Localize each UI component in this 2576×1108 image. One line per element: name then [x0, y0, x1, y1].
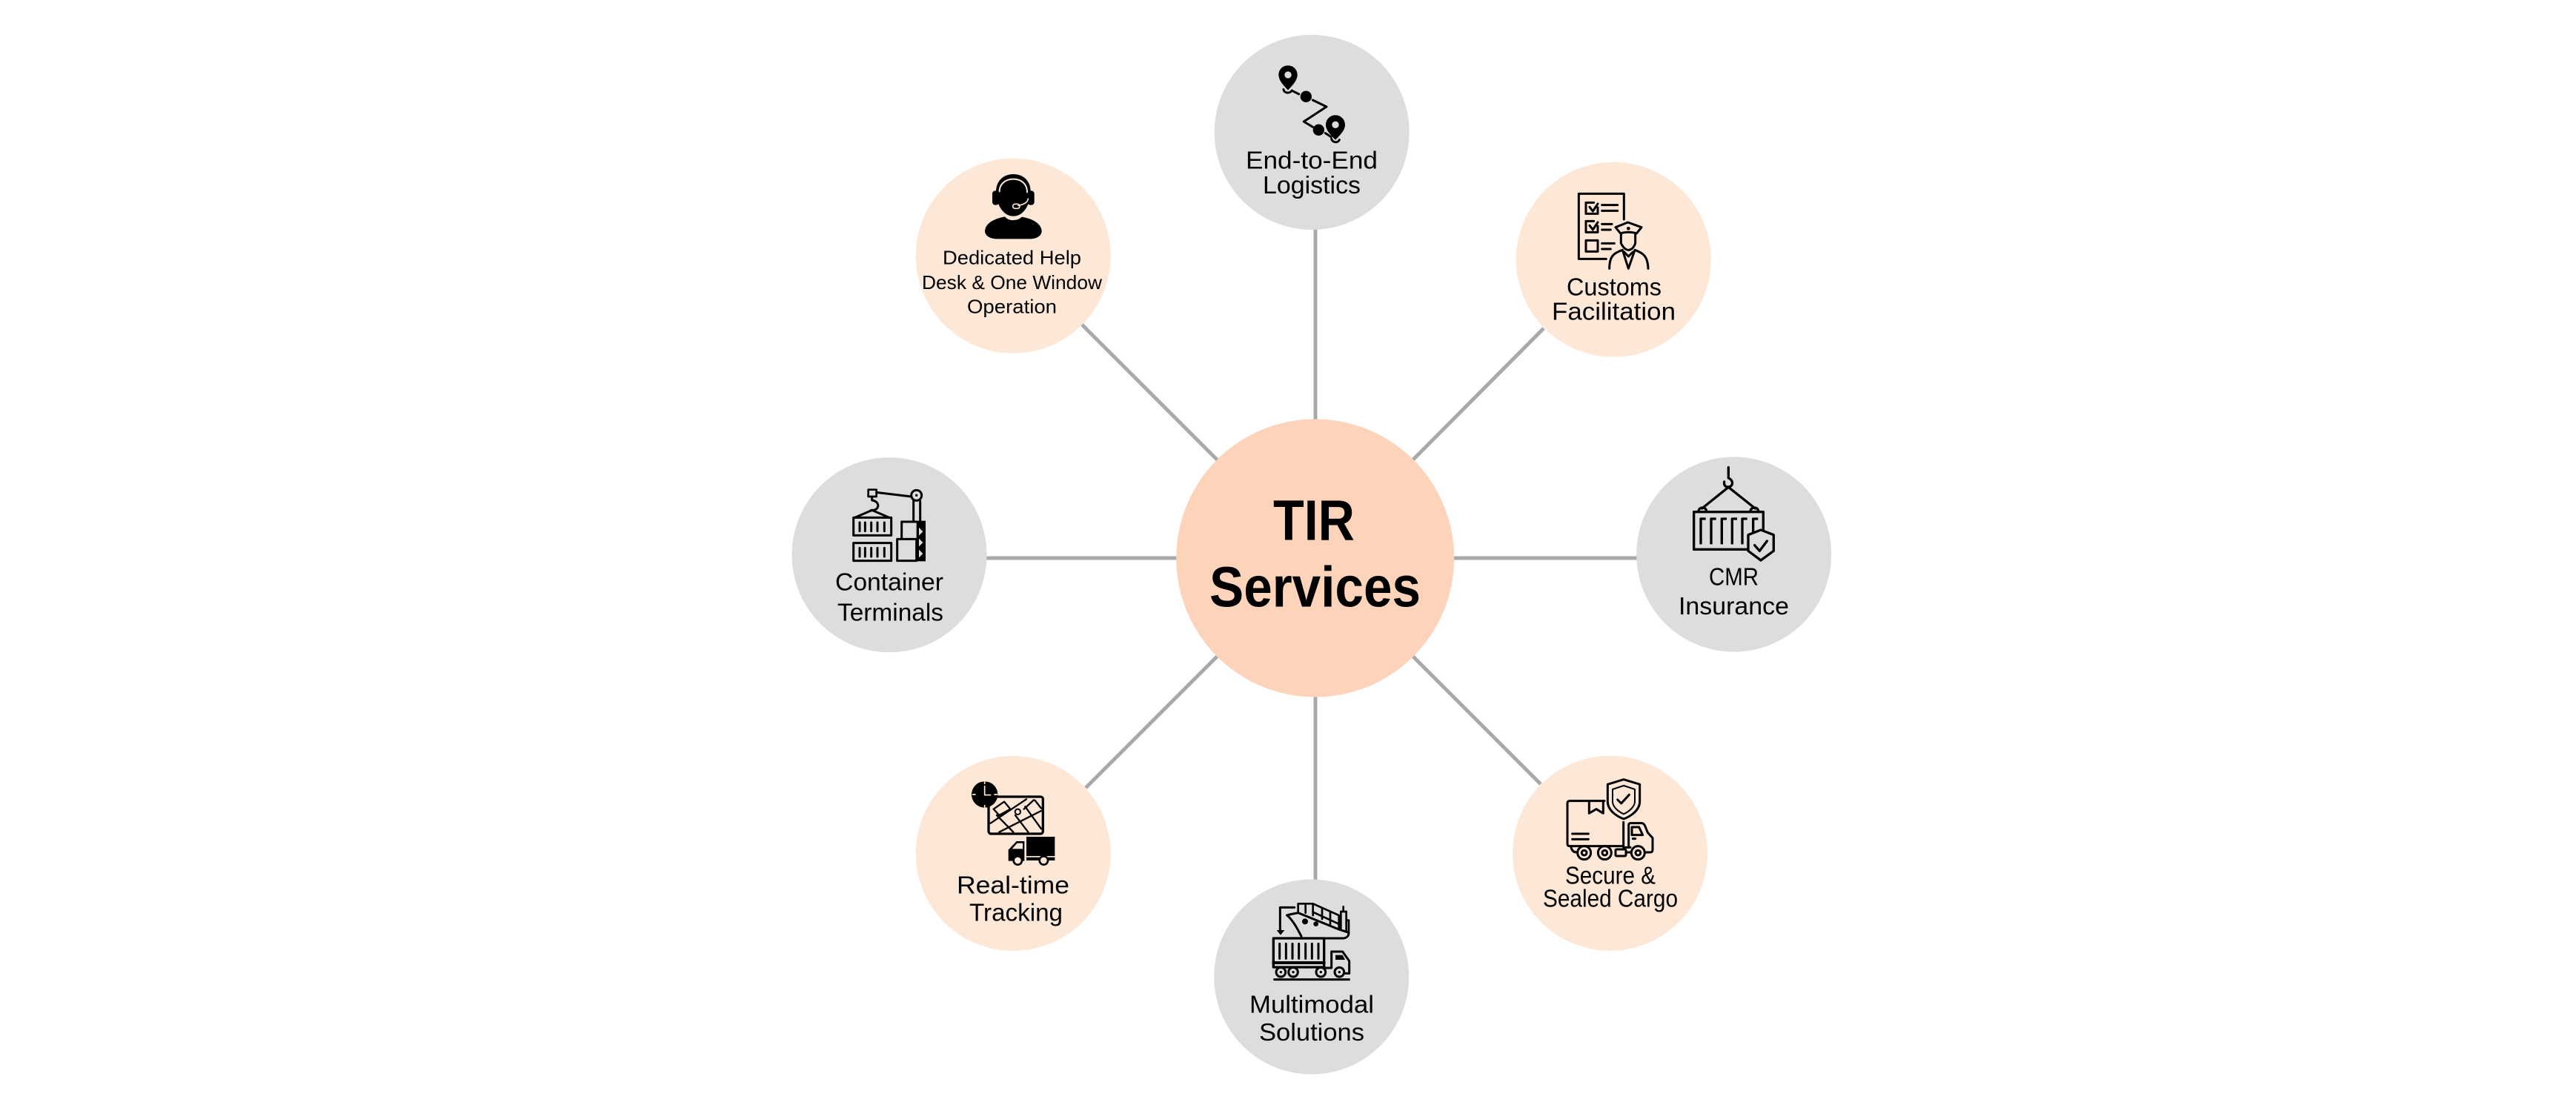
label: Sealed Cargo — [1543, 884, 1678, 912]
node: Dedicated Help Desk & One Window Operation — [916, 159, 1111, 354]
label: Facilitation — [1552, 298, 1676, 325]
label: Dedicated Help — [943, 247, 1081, 269]
icon: ship and container truck — [1273, 903, 1350, 980]
icon: route with map pins — [1278, 65, 1345, 142]
icon: hoisted container with shield — [1694, 468, 1773, 560]
label: Operation — [967, 295, 1057, 317]
label — [1543, 861, 1678, 912]
node: Customs Facilitation — [1516, 162, 1711, 357]
label: Insurance — [1679, 592, 1789, 620]
label — [957, 872, 1069, 926]
label: Solutions — [1259, 1018, 1364, 1046]
node: End-to-End Logistics — [1215, 35, 1410, 230]
label: Terminals — [837, 598, 943, 626]
label: Logistics — [1263, 171, 1361, 199]
icon: checklist with customs officer — [1579, 193, 1648, 268]
label: Customs — [1567, 273, 1662, 300]
label: Multimodal — [1249, 991, 1374, 1018]
label — [922, 247, 1102, 317]
label: CMR — [1709, 563, 1759, 590]
label: Container — [835, 568, 943, 596]
label: Desk & One Window — [922, 271, 1102, 293]
central hub: TIR Services — [1176, 419, 1454, 697]
node: Multimodal Solutions — [1214, 879, 1409, 1075]
label: Secure & — [1565, 861, 1656, 889]
icon: support agent with headset — [985, 174, 1042, 239]
label — [1679, 563, 1789, 620]
icon: clock, map and truck — [972, 781, 1055, 865]
title: Services — [1209, 555, 1421, 619]
label — [1249, 991, 1374, 1046]
title: TIR — [1273, 488, 1355, 552]
title — [1209, 488, 1421, 619]
icon: crane with containers — [854, 490, 926, 561]
connector lines from hub to service nodes — [985, 228, 1638, 881]
label — [835, 568, 943, 626]
icon: truck with shield — [1567, 780, 1653, 860]
label: Real-time — [957, 872, 1069, 899]
label: End-to-End — [1246, 146, 1378, 173]
label — [1552, 273, 1676, 325]
node: CMR Insurance — [1636, 457, 1831, 652]
node: Real-time Tracking — [916, 756, 1111, 951]
node: Secure & Sealed Cargo — [1513, 756, 1707, 951]
label — [1246, 146, 1378, 199]
label: Tracking — [969, 899, 1063, 926]
node: Container Terminals — [791, 457, 987, 652]
